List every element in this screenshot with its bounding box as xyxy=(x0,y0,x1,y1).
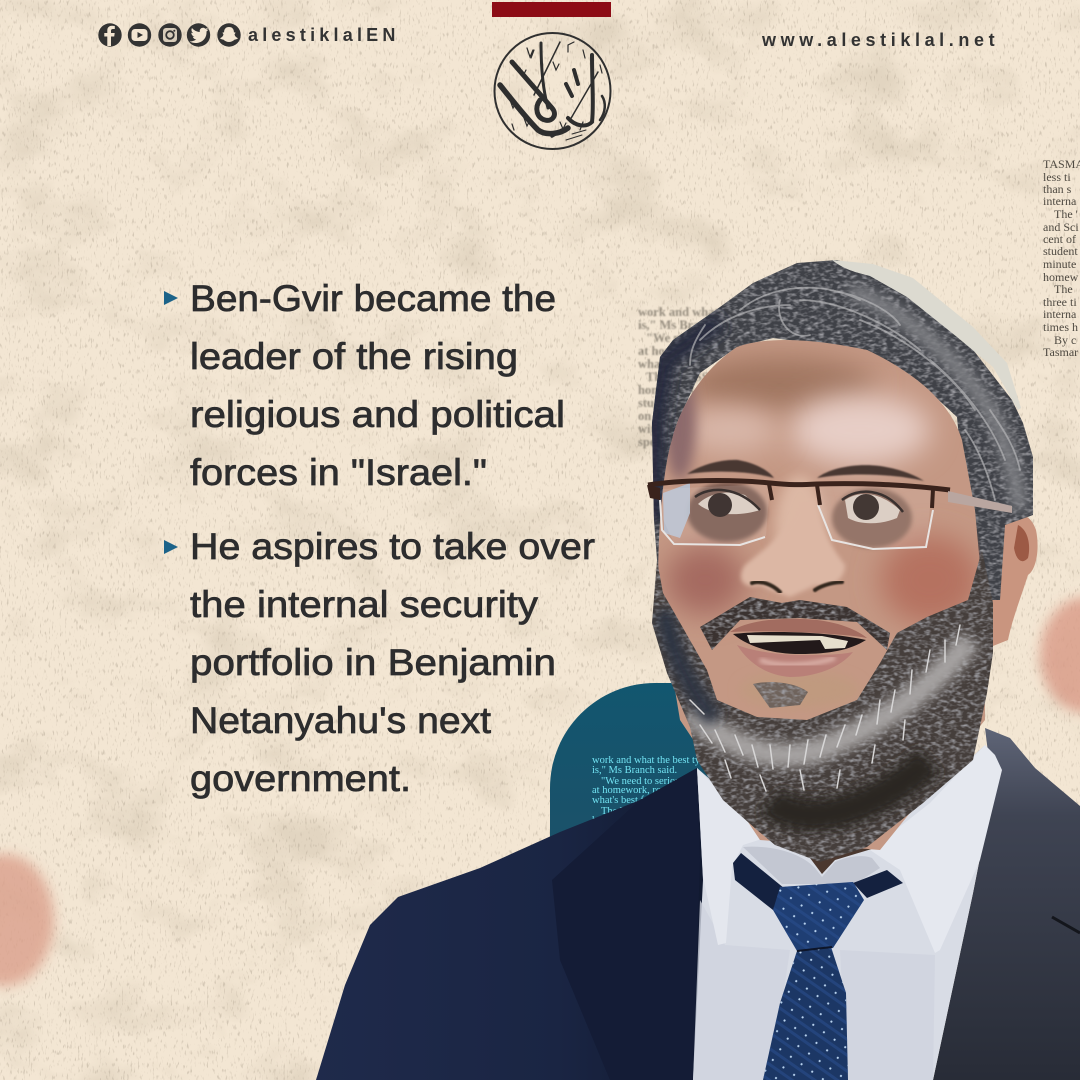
newspaper clipping right edge: times h xyxy=(1043,320,1078,334)
newspaper clipping right edge: less ti xyxy=(1043,170,1071,184)
newspaper clipping right edge: By c xyxy=(1054,333,1076,347)
newspaper text on arch: what's best for our xyxy=(592,795,670,806)
hair grey streaks xyxy=(690,288,1020,500)
blurred newspaper fragment behind head: students in xyxy=(638,396,696,410)
newspaper clipping right edge: three ti xyxy=(1043,295,1077,309)
newspaper clipping right edge: Tasmar xyxy=(1043,345,1078,359)
newspaper clipping right edge: interna xyxy=(1043,194,1077,208)
newspaper clipping right edge: minute xyxy=(1043,257,1076,271)
social icons xyxy=(98,23,241,47)
soul patch xyxy=(753,682,808,708)
icon: instagram xyxy=(158,23,182,47)
newspaper text on arch: is," Ms Branch said. xyxy=(592,765,677,776)
bullet 1 text: religious and political xyxy=(190,394,565,435)
shirt collar left xyxy=(697,768,765,945)
blurred newspaper fragment behind head: The TIMSS xyxy=(646,370,709,384)
blurred newspaper fragment behind head: homework is xyxy=(638,383,707,397)
newspaper clipping right edge: and Sci xyxy=(1043,220,1079,234)
teal arch panel xyxy=(550,683,720,843)
newspaper text on arch: work and what the best ty xyxy=(592,755,701,766)
newspaper text on arch: homework is xyxy=(592,815,647,826)
suit right xyxy=(933,728,1080,1080)
top red bar xyxy=(492,2,611,17)
tie xyxy=(733,853,903,1080)
glasses xyxy=(647,481,1012,549)
blurred newspaper fragment behind head xyxy=(638,305,719,449)
face xyxy=(658,340,985,850)
portrait of Ben-Gvir xyxy=(316,260,1080,1080)
newspaper text on arch: The TIMSS xyxy=(601,806,651,817)
newspaper clipping right edge: cent of xyxy=(1043,232,1076,246)
bullet 1 text: Ben-Gvir became the xyxy=(190,278,556,319)
ear xyxy=(985,513,1038,646)
logo: calligraphy roundel xyxy=(494,33,610,149)
mustache xyxy=(700,597,890,650)
shirt xyxy=(693,745,993,1080)
shirt shading xyxy=(693,900,935,1080)
blurred newspaper fragment behind head: work and what xyxy=(638,305,719,319)
newspaper clipping right edge: homew xyxy=(1043,270,1079,284)
collar inner band xyxy=(743,847,880,884)
newspaper clipping right edge xyxy=(1043,157,1080,359)
newspaper clipping right edge: interna xyxy=(1043,307,1077,321)
blurred newspaper fragment behind head: on average xyxy=(638,409,696,423)
bullet 1 text: leader of the rising xyxy=(190,336,518,377)
bullet 1 text: forces in "Israel." xyxy=(190,452,487,493)
neck shadow xyxy=(765,810,900,874)
icon: snapchat xyxy=(217,23,241,47)
nose xyxy=(741,500,845,597)
newspaper text on arch: at homework, review xyxy=(592,785,681,796)
beard xyxy=(652,552,993,862)
icon: twitter xyxy=(187,23,210,47)
whiskers xyxy=(690,625,960,791)
newspaper clipping right edge: The ' xyxy=(1054,207,1078,221)
newspaper clipping right edge: The xyxy=(1054,282,1073,296)
bullet 1 marker xyxy=(164,291,178,305)
kippah xyxy=(832,260,1021,410)
bullet 2 text xyxy=(190,526,595,799)
shirt collar right xyxy=(870,745,1002,953)
eyes xyxy=(687,482,912,548)
newspaper text on arch: "We need to seriously xyxy=(601,776,694,787)
social handle: alestiklalEN xyxy=(248,25,398,45)
bullet list xyxy=(164,278,595,799)
bullet 2 text: Netanyahu's next xyxy=(190,700,492,741)
blurred newspaper fragment behind head: at homework, xyxy=(638,344,712,358)
bullet 2 text: the internal security xyxy=(190,584,539,625)
newspaper clipping right edge: student xyxy=(1043,244,1078,258)
newspaper text on arch xyxy=(592,756,698,819)
bullet 1 text xyxy=(190,278,565,493)
blurred newspaper fragment behind head: "We need to xyxy=(646,331,712,345)
pink blob left xyxy=(0,854,54,986)
suit left xyxy=(316,768,720,1080)
pink blob right xyxy=(1040,597,1080,713)
suit pocket mark xyxy=(1052,917,1080,933)
bullet 2 marker xyxy=(164,540,178,554)
blurred newspaper fragment behind head: spent on xyxy=(638,435,683,449)
icon: facebook xyxy=(98,23,122,47)
blurred newspaper fragment behind head: what's best xyxy=(638,357,698,371)
icon: youtube xyxy=(128,23,151,47)
blurred newspaper fragment behind head: is," Ms Branch xyxy=(638,318,719,332)
eyebrows xyxy=(687,460,924,481)
hair xyxy=(652,260,1033,600)
mouth xyxy=(730,619,867,677)
blurred newspaper fragment behind head: with more xyxy=(638,422,693,436)
bullet 2 text: portfolio in Benjamin xyxy=(190,642,556,683)
suit lapel shading xyxy=(552,768,700,1080)
newspaper clipping right edge: than s xyxy=(1043,182,1072,196)
website url: www.alestiklal.net xyxy=(761,30,998,50)
bullet 2 text: He aspires to take over xyxy=(190,526,595,567)
bullet 2 text: government. xyxy=(190,758,411,799)
